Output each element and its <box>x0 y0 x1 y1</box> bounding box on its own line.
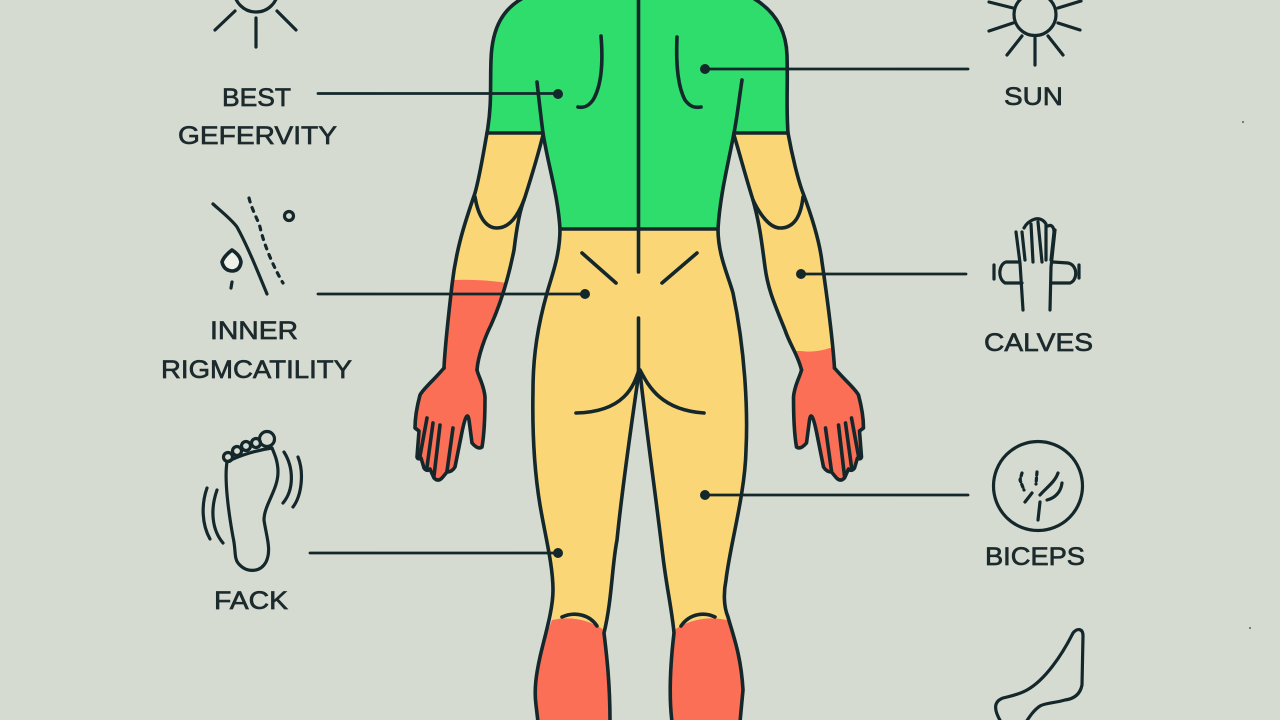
label: sun: SUN <box>1004 83 1063 111</box>
icon: foot with motion arcs <box>203 432 301 570</box>
label: inner rigmcatility: RIGMCATILITY <box>161 356 352 384</box>
leader line: calves <box>796 269 966 279</box>
leader line: inner rigmcatility <box>318 289 590 299</box>
right hand <box>794 368 864 480</box>
icon: left sun <box>215 0 296 47</box>
icon: foot outline cropped at bottom <box>996 630 1083 720</box>
icon: vein and droplets <box>213 198 294 294</box>
icon: hand <box>994 219 1079 310</box>
left hand <box>415 368 485 480</box>
label: best gefervity <box>178 84 337 150</box>
label: calves: CALVES <box>984 329 1093 357</box>
back and shoulders: green zone <box>487 0 788 229</box>
body figure <box>415 0 864 720</box>
right arm fills <box>736 134 833 370</box>
leader line: biceps <box>700 490 968 500</box>
leader line: fack <box>310 548 563 558</box>
icon: circled arm <box>994 442 1082 530</box>
left arm fills <box>446 134 542 370</box>
leader line: sun <box>700 64 968 74</box>
icon: right sun <box>989 0 1081 65</box>
label: fack: FACK <box>214 587 288 615</box>
body outline <box>444 0 834 720</box>
label: inner rigmcatility: INNER <box>210 317 298 345</box>
hips and thighs: yellow zone <box>533 229 747 633</box>
label: best gefervity: GEFERVITY <box>178 122 337 150</box>
lower legs: red zone <box>535 618 743 720</box>
label: best gefervity: BEST <box>222 84 291 112</box>
leader line: best gefervity <box>318 89 563 99</box>
label: biceps: BICEPS <box>985 543 1085 571</box>
label: inner rigmcatility <box>161 317 352 384</box>
